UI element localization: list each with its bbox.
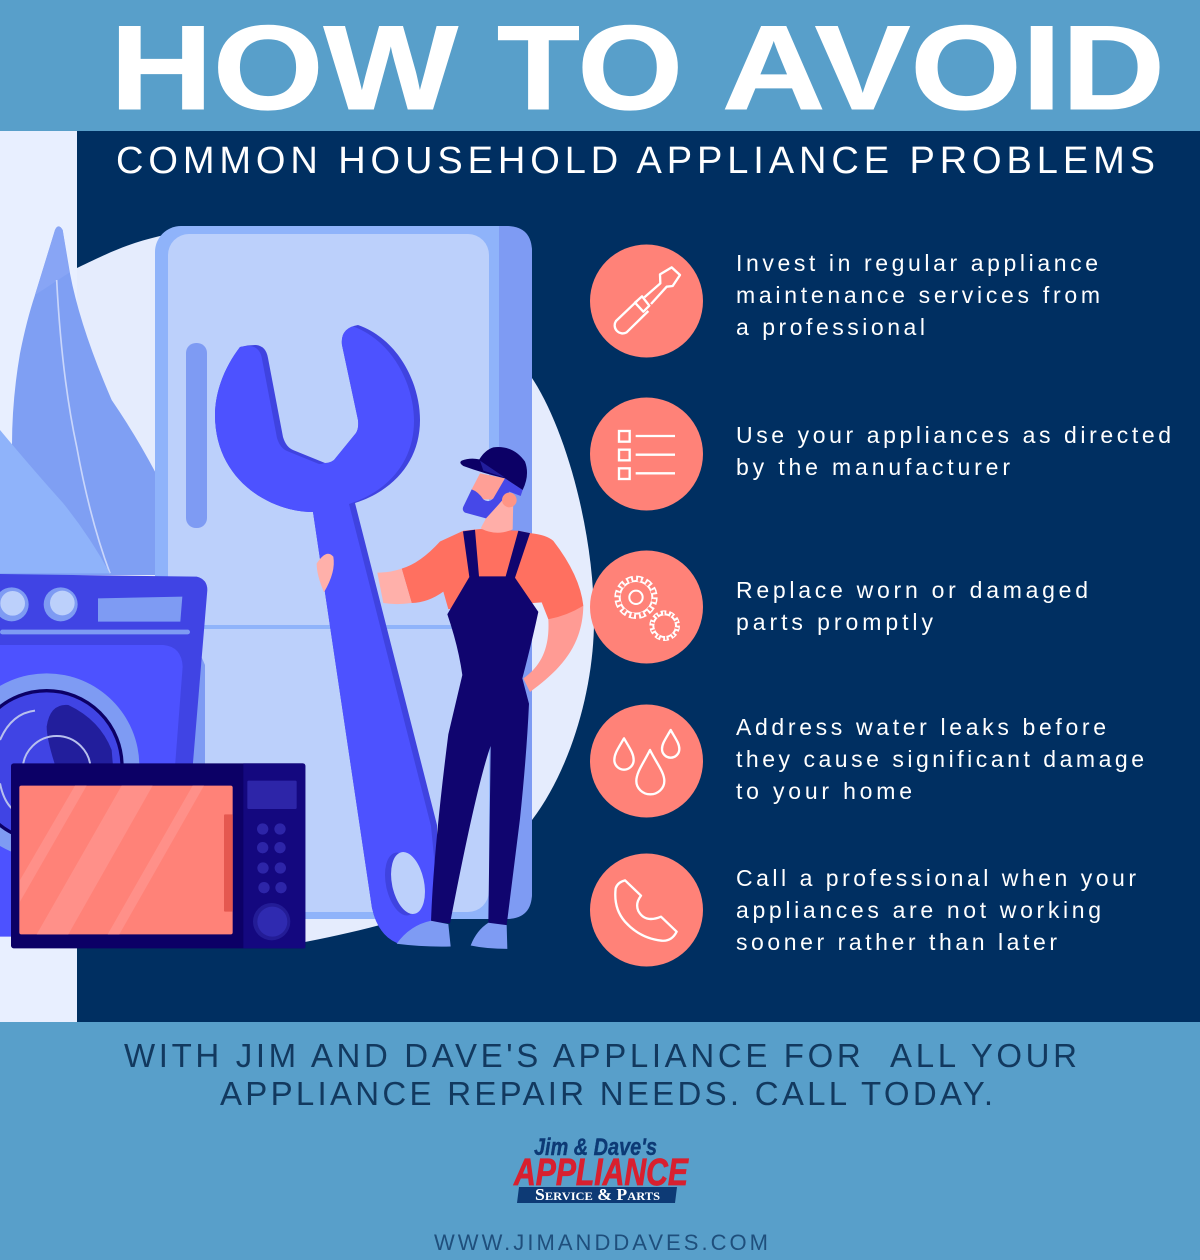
top band xyxy=(0,0,1200,131)
text: Address water leaks before xyxy=(736,714,1106,740)
title xyxy=(110,1,1165,135)
cap xyxy=(460,447,527,490)
leaves xyxy=(0,226,155,575)
head xyxy=(460,447,527,533)
boots xyxy=(397,921,507,949)
text: a professional xyxy=(736,314,925,340)
tip 2: directions xyxy=(590,398,1171,510)
refrigerator xyxy=(155,226,532,919)
illustration: appliance repair scene xyxy=(0,226,594,961)
title: HOW xyxy=(110,1,459,135)
icon: screwdriver xyxy=(590,244,703,358)
logo: Service & Parts xyxy=(535,1185,660,1204)
tip 4: water leaks xyxy=(590,704,1144,818)
text: they cause significant damage xyxy=(736,746,1144,772)
icon: phone xyxy=(590,854,703,966)
tip 3: parts xyxy=(590,550,1088,664)
text: maintenance services from xyxy=(736,282,1100,308)
lower arm right xyxy=(523,606,583,692)
call to action: APPLIANCE REPAIR NEEDS. CALL TODAY. xyxy=(220,1075,993,1112)
bottom band xyxy=(0,1022,1200,1260)
overalls xyxy=(431,530,538,925)
icon: checklist xyxy=(590,398,703,510)
neck xyxy=(481,493,513,533)
text: Use your appliances as directed xyxy=(736,422,1171,448)
text: sooner rather than later xyxy=(736,929,1057,955)
icon: water drops xyxy=(590,704,703,818)
face xyxy=(472,473,505,499)
wrench xyxy=(215,325,437,943)
text: Replace worn or damaged xyxy=(736,577,1088,603)
repair man xyxy=(317,447,583,949)
subtitle: COMMON HOUSEHOLD APPLIANCE PROBLEMS xyxy=(116,140,1155,182)
tip 5: call a professional xyxy=(590,854,1136,966)
text: parts promptly xyxy=(736,609,934,635)
icon: gears xyxy=(590,550,703,664)
text: Invest in regular appliance xyxy=(736,250,1098,276)
text: Call a professional when your xyxy=(736,865,1136,891)
website: WWW.JIMANDDAVES.COM xyxy=(434,1230,768,1255)
microwave xyxy=(11,763,305,948)
logo: APPLIANCE xyxy=(513,1152,689,1194)
left light strip xyxy=(0,131,77,1022)
beard and strap xyxy=(463,478,523,518)
washing machine xyxy=(0,574,207,937)
logo xyxy=(513,1134,689,1204)
call to action: WITH JIM AND DAVE'S APPLIANCE FOR ALL YOUR xyxy=(124,1037,1077,1074)
title: TO xyxy=(497,1,683,135)
title: AVOID xyxy=(722,1,1165,135)
text: to your home xyxy=(736,778,912,804)
shirt xyxy=(402,529,583,619)
hand on wrench xyxy=(317,554,334,592)
body xyxy=(317,529,583,949)
tip 1: maintenance xyxy=(590,244,1100,358)
text: appliances are not working xyxy=(736,897,1101,923)
background circle xyxy=(77,229,594,948)
ear xyxy=(502,493,517,507)
logo: Jim & Dave's xyxy=(534,1134,657,1161)
text: by the manufacturer xyxy=(736,454,1010,480)
forearm xyxy=(377,569,412,604)
navy panel xyxy=(77,131,1200,1022)
